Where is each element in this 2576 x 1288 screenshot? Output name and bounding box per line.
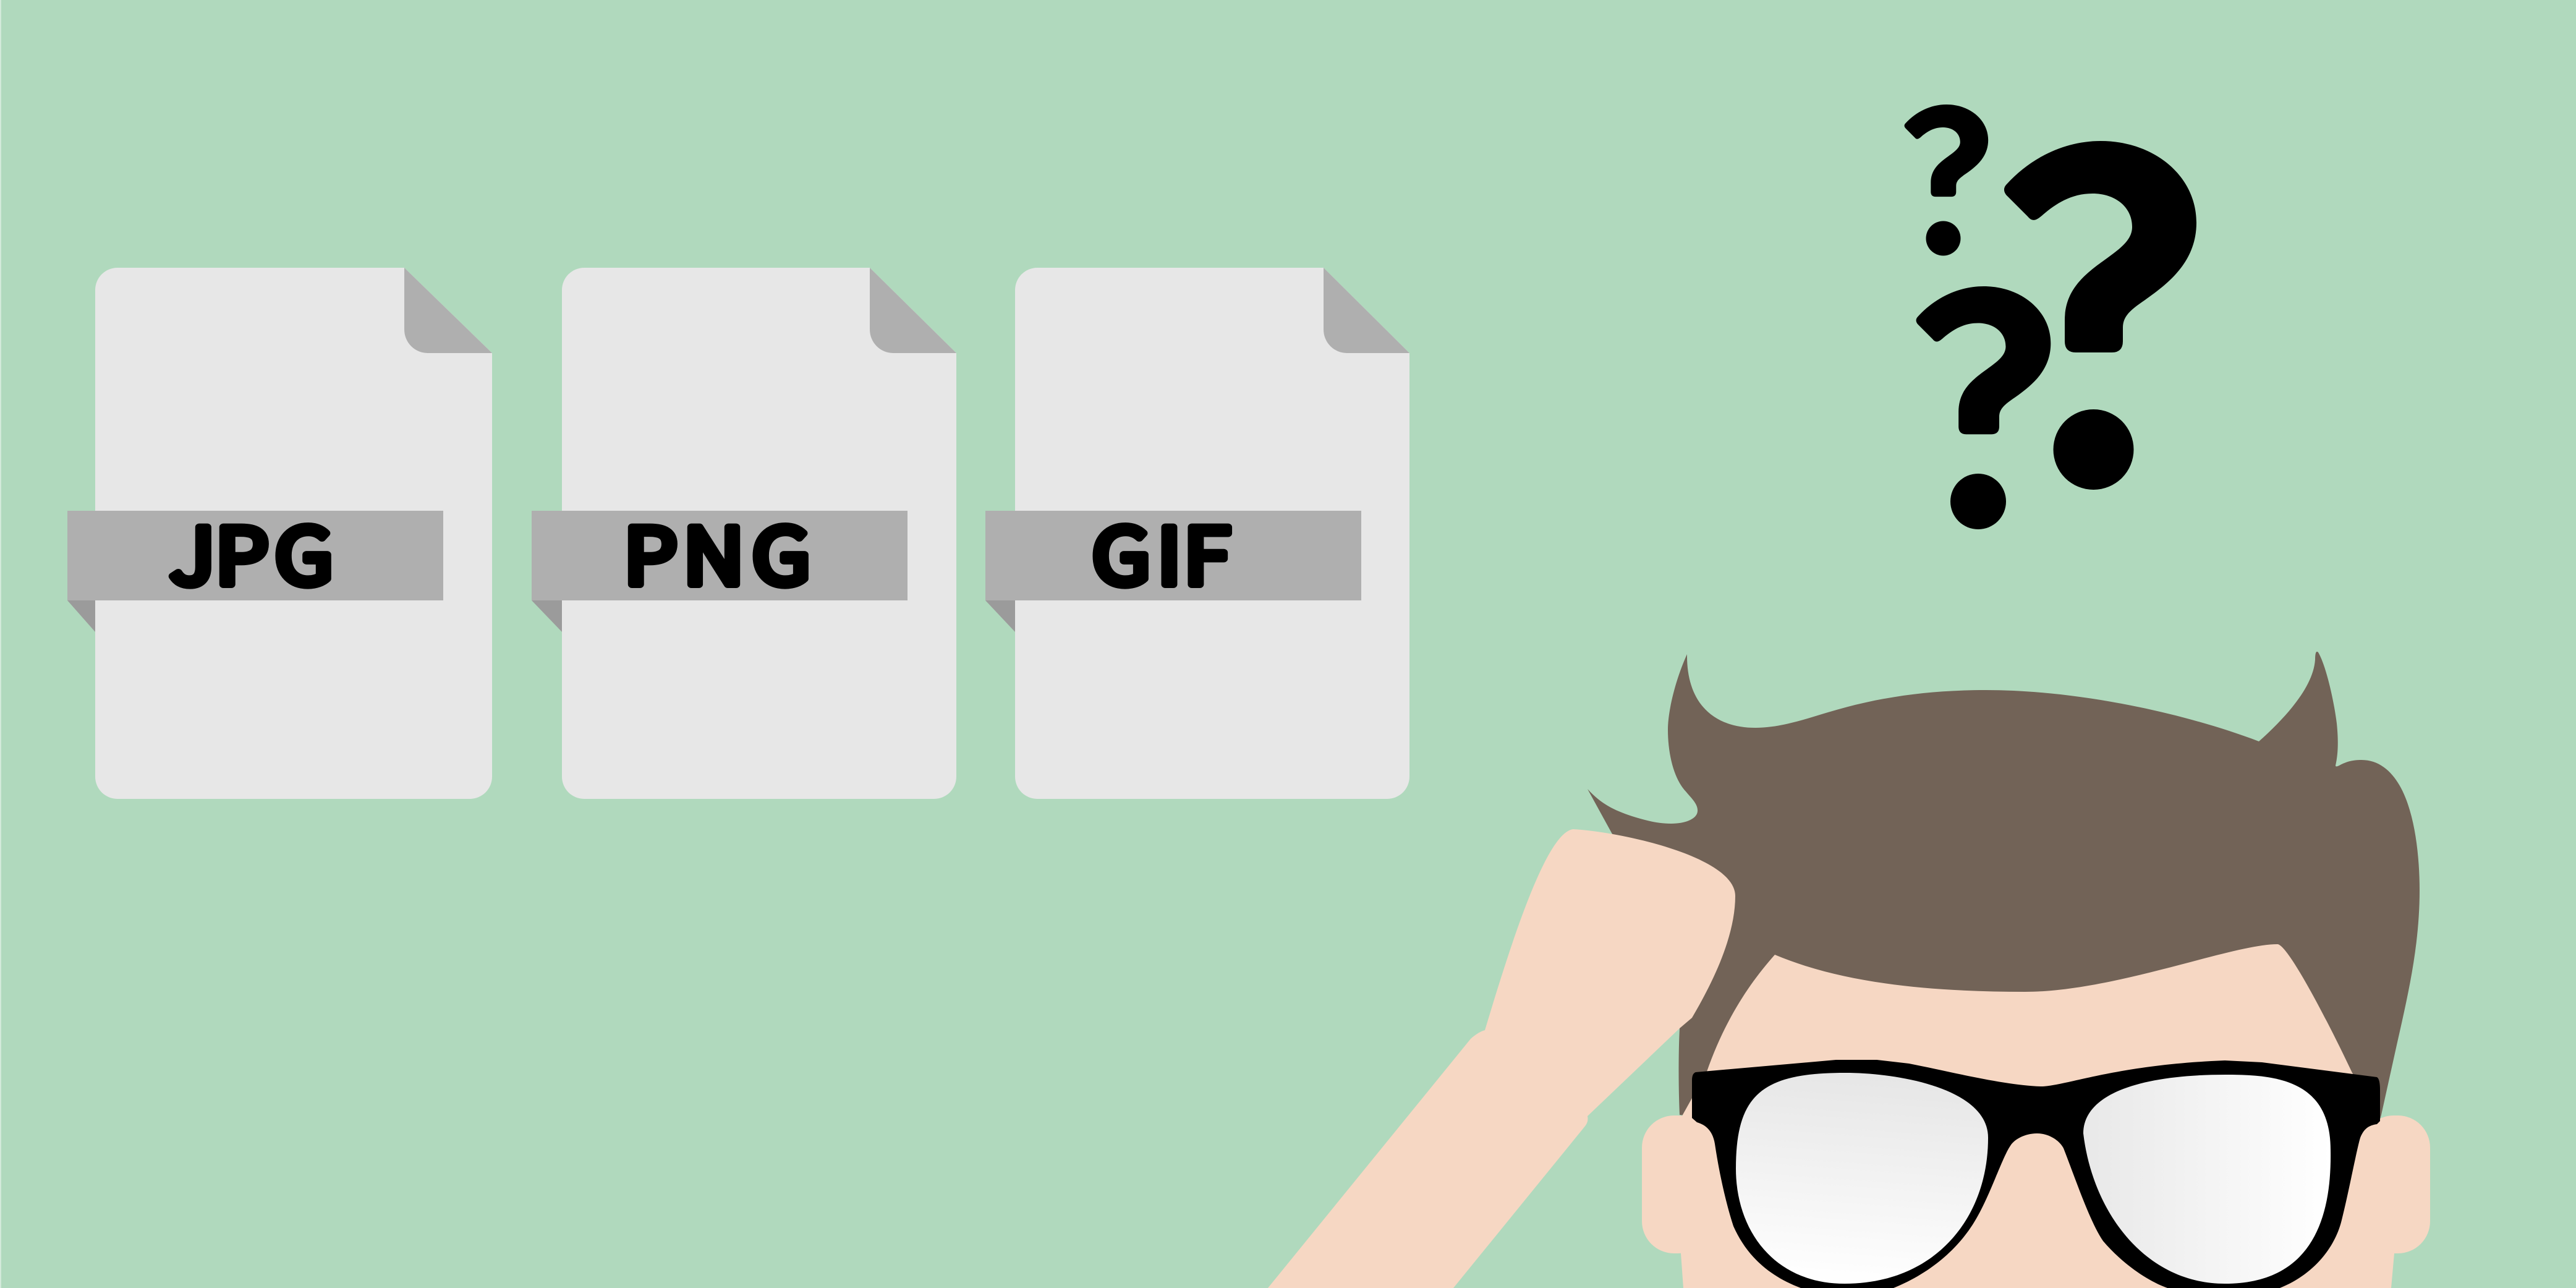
medium question mark [1916,286,2051,529]
label JPG: JPG [169,494,333,607]
ribbon band [985,511,1361,600]
right lens [2083,1075,2331,1284]
ribbon band [532,511,908,600]
folded corner [870,268,956,353]
face [1680,944,2394,1288]
folded corner [1324,268,1409,353]
confused man [1268,652,2430,1288]
raised arm and hand [1268,829,1735,1288]
label PNG: PNG [623,494,811,607]
file icon: JPG [67,268,492,799]
file icon: PNG [532,268,956,799]
folded corner [404,268,492,353]
right ear [2361,1115,2430,1253]
glasses frame [1692,1060,2380,1288]
file sheet [95,268,492,799]
ribbon band [67,511,443,600]
file sheet [1015,268,1409,799]
file sheet [562,268,956,799]
left ear [1642,1115,1710,1253]
hair [1588,652,2420,1127]
ribbon fold [985,600,1015,632]
small question mark [1905,104,1988,256]
left lens [1736,1073,1988,1284]
large question mark [2004,141,2196,490]
question marks [1905,104,2196,529]
ribbon fold [67,600,95,632]
label GIF: GIF [1092,494,1231,607]
file icon: GIF [985,268,1409,799]
ribbon fold [532,600,562,632]
